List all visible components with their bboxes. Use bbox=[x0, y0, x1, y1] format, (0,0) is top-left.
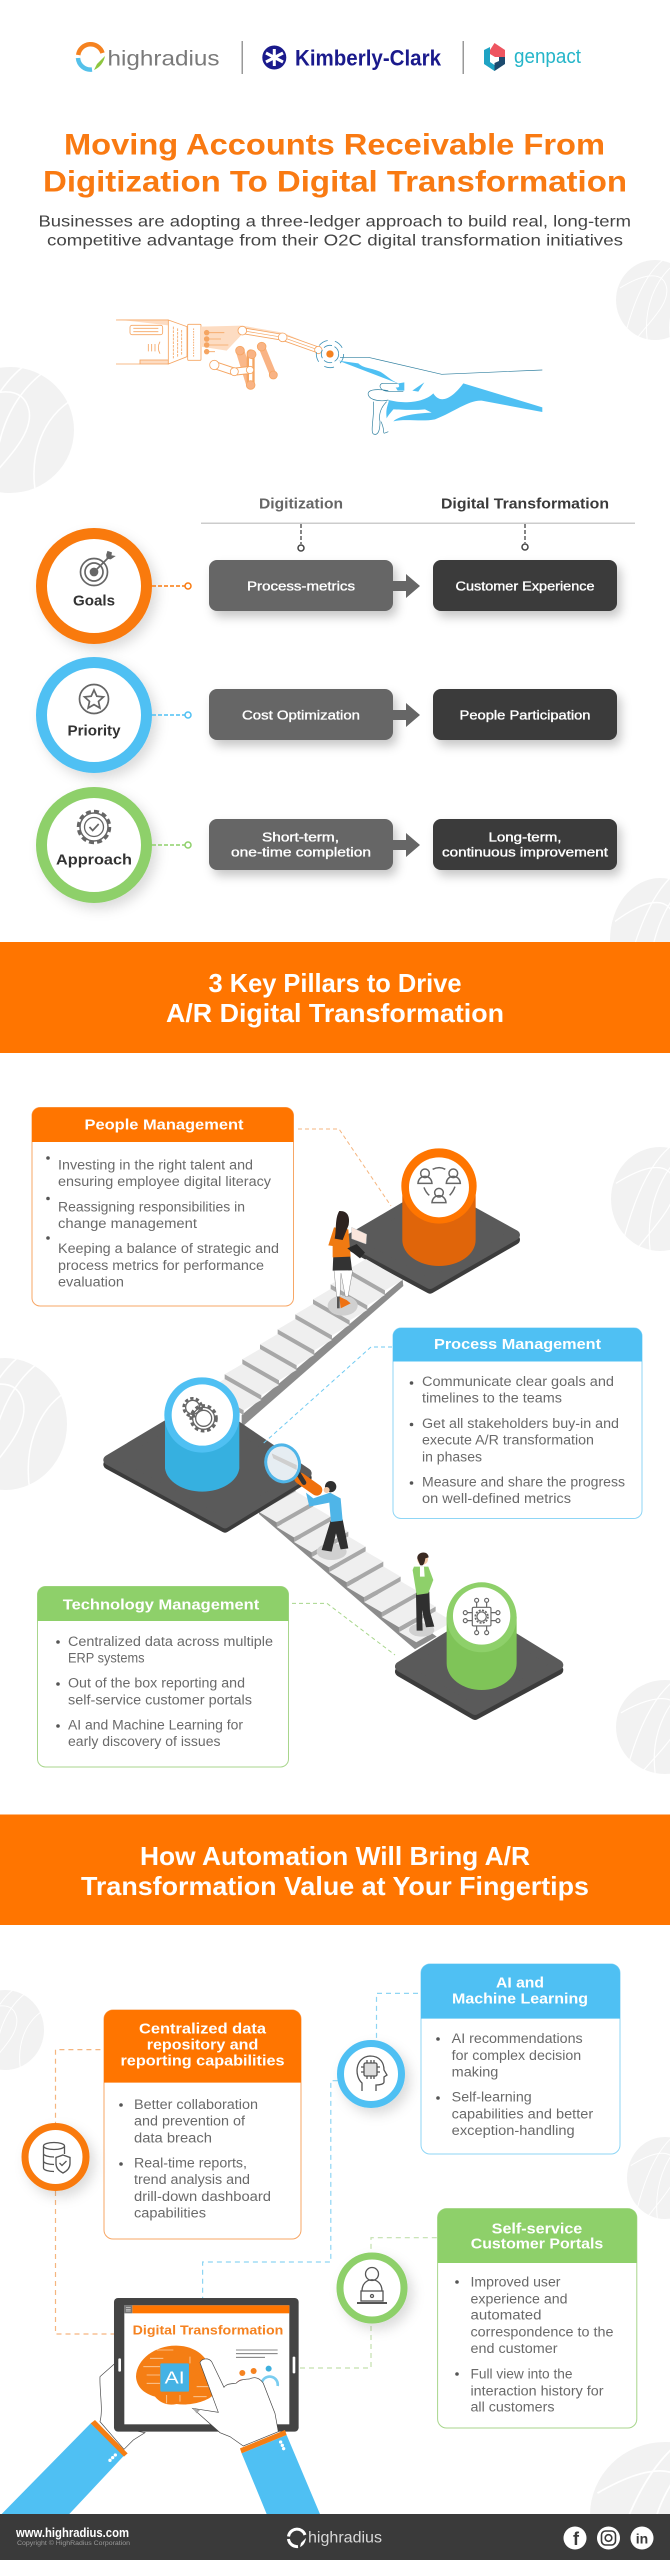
logo: Kimberly-Clark: Kimberly-Clark bbox=[295, 46, 442, 70]
bullet list: Full view into the bbox=[470, 2366, 572, 2382]
title: Digitization To Digital Transformation bbox=[43, 166, 627, 198]
panel: People Management bbox=[32, 1108, 294, 1306]
bullet list: Get all stakeholders buy-in and bbox=[422, 1416, 619, 1431]
circle: Goals: Goals bbox=[73, 592, 115, 610]
left hand outline bbox=[100, 2363, 145, 2449]
illustration: robot hand bbox=[116, 319, 344, 389]
platform: process pillar bbox=[108, 1403, 307, 1528]
figure: man in green bbox=[409, 1553, 434, 1637]
sleeve: left bbox=[2, 2420, 128, 2514]
digitization box bbox=[209, 560, 393, 611]
logo: genpact bbox=[484, 43, 581, 71]
bullet list: early discovery of issues bbox=[68, 1734, 221, 1749]
logo: genpact: genpact bbox=[514, 46, 581, 68]
illustration: human hand bbox=[338, 357, 542, 434]
panel: Centralized data bbox=[104, 2010, 301, 2239]
icon: linkedin: in bbox=[636, 2530, 648, 2546]
bullet list: AI and Machine Learning for bbox=[68, 1718, 244, 1732]
bullet list: capabilities bbox=[134, 2206, 206, 2220]
panel heading: repository and bbox=[147, 2036, 258, 2054]
panel: Technology Management bbox=[38, 1586, 288, 1767]
bullet list: data breach bbox=[134, 2130, 212, 2146]
panel heading bbox=[32, 1108, 294, 1142]
brain graphic: AI bbox=[165, 2368, 185, 2388]
connector: technology bbox=[292, 1603, 395, 1655]
icon: touch spark bbox=[316, 340, 344, 368]
brain graphic bbox=[136, 2346, 213, 2405]
title: Moving Accounts Receivable From bbox=[64, 128, 605, 162]
column header: Digitization: Digitization bbox=[259, 496, 343, 512]
bullet list: on well-defined metrics bbox=[422, 1491, 571, 1506]
panel heading: People Management bbox=[84, 1116, 244, 1134]
figure: man with magnifier bbox=[261, 1440, 348, 1560]
logo: highradius: highradius bbox=[108, 48, 220, 70]
digitization box bbox=[209, 689, 393, 740]
panel heading: Machine Learning bbox=[452, 1990, 588, 2008]
panel heading: reporting capabilities bbox=[120, 2052, 284, 2070]
platform: technology pillar bbox=[400, 1617, 558, 1715]
bullet list: trend analysis and bbox=[134, 2172, 250, 2187]
subtitle bbox=[38, 214, 631, 250]
bullet list: Investing in the right talent and bbox=[58, 1158, 253, 1172]
bullet list: correspondence to the bbox=[470, 2324, 614, 2340]
bullet list: change management bbox=[58, 1216, 197, 1231]
transformation box: Long-term, bbox=[488, 830, 562, 844]
panel: AI and Machine Learning bbox=[421, 1964, 620, 2154]
bullet list: in phases bbox=[422, 1450, 482, 1464]
transformation box: continuous improvement bbox=[442, 844, 608, 860]
bullet list: execute A/R transformation bbox=[422, 1432, 594, 1448]
transformation box bbox=[433, 560, 617, 611]
icon: gears bbox=[184, 1398, 216, 1431]
banner: 3 Key Pillars bbox=[0, 942, 670, 1053]
circle: Approach: Approach bbox=[56, 852, 132, 868]
icon: instagram bbox=[597, 2526, 620, 2550]
bullet list: timelines to the teams bbox=[422, 1390, 562, 1406]
banner: How Automation: Transformation Value at Your Fingertips bbox=[81, 1871, 589, 1901]
icon: people network bbox=[418, 1168, 460, 1203]
panel heading: Centralized data bbox=[139, 2020, 267, 2038]
bullet list: experience and bbox=[470, 2292, 568, 2306]
icon: star bbox=[80, 684, 108, 714]
transformation box bbox=[433, 819, 617, 870]
icon: database shield bbox=[25, 2126, 86, 2188]
panel heading bbox=[421, 1964, 620, 2019]
icon: facebook: f bbox=[573, 2529, 580, 2549]
icon: facebook bbox=[564, 2526, 586, 2550]
icon: linkedin bbox=[630, 2526, 654, 2550]
pillar: technology bbox=[447, 1582, 517, 1690]
bullet list: Improved user bbox=[470, 2274, 561, 2290]
bullet list: and prevention of bbox=[134, 2114, 245, 2128]
bullet list: Out of the box reporting and bbox=[68, 1676, 245, 1690]
banner: How Automation bbox=[0, 1814, 670, 1925]
digitization box: Process-metrics bbox=[247, 578, 356, 594]
circle: Goals bbox=[42, 534, 146, 638]
bullet list: for complex decision bbox=[452, 2048, 581, 2063]
platform: people pillar bbox=[348, 1190, 515, 1289]
bullet list: Measure and share the progress bbox=[422, 1474, 625, 1490]
logo: highradius bbox=[78, 44, 220, 70]
bullet list: self-service customer portals bbox=[68, 1692, 252, 1708]
figure: woman with laptop bbox=[328, 1211, 367, 1316]
bullet list: ERP systems bbox=[68, 1650, 145, 1666]
arrow bbox=[393, 703, 420, 727]
bullet list: Real-time reports, bbox=[134, 2156, 247, 2170]
panel heading bbox=[104, 2010, 301, 2083]
digitization box: one-time completion bbox=[231, 844, 371, 860]
icon: gear with check bbox=[78, 812, 110, 842]
bullet list: making bbox=[452, 2064, 498, 2080]
bullet list: process metrics for performance bbox=[58, 1258, 264, 1273]
bullet list bbox=[134, 2097, 271, 2220]
banner: How Automation: How Automation Will Bring A/R bbox=[140, 1841, 530, 1871]
bullet list: Communicate clear goals and bbox=[422, 1374, 614, 1389]
banner: 3 Key Pillars: A/R Digital Transformation bbox=[166, 998, 504, 1028]
bullet list: all customers bbox=[470, 2400, 555, 2414]
bullet list: automated bbox=[470, 2308, 542, 2322]
bullet list bbox=[452, 2031, 594, 2138]
bullet list: drill-down dashboard bbox=[134, 2189, 271, 2204]
right hand bbox=[193, 2359, 278, 2446]
circle: Approach bbox=[42, 792, 146, 898]
bullet list bbox=[422, 1374, 625, 1506]
chart lines and gauges bbox=[236, 2350, 278, 2386]
bullet list: Self-learning bbox=[452, 2090, 532, 2104]
icon: user at laptop bbox=[340, 2256, 404, 2320]
title bbox=[43, 128, 627, 198]
bullet list: Centralized data across multiple bbox=[68, 1634, 273, 1649]
bullet list: Better collaboration bbox=[134, 2097, 258, 2112]
digitization box: Short-term, bbox=[262, 830, 339, 844]
panel heading: Process Management bbox=[434, 1336, 601, 1353]
bullet list: Keeping a balance of strategic and bbox=[58, 1241, 279, 1256]
stairs: upper flight bbox=[207, 1259, 403, 1427]
illustration: staircase with three pillars bbox=[108, 1148, 558, 1715]
stairs: lower flight bbox=[241, 1476, 453, 1649]
bullet list bbox=[58, 1158, 279, 1290]
pillar: process bbox=[164, 1377, 240, 1492]
subtitle: Businesses are adopting a three-ledger approach to build real, long-term bbox=[38, 214, 631, 230]
bullet list bbox=[470, 2274, 614, 2414]
bullet list: exception-handling bbox=[452, 2123, 575, 2138]
panel heading bbox=[38, 1586, 288, 1621]
banner: 3 Key Pillars: 3 Key Pillars to Drive bbox=[208, 968, 462, 998]
panel heading bbox=[438, 2209, 637, 2263]
tablet bbox=[114, 2298, 299, 2432]
bullet list: interaction history for bbox=[470, 2384, 604, 2398]
footer bbox=[0, 2514, 670, 2560]
transformation box: People Participation bbox=[460, 708, 590, 722]
digitization box bbox=[209, 819, 393, 870]
bullet list: evaluation bbox=[58, 1274, 124, 1290]
subtitle: competitive advantage from their O2C digital transformation initiatives bbox=[47, 232, 623, 250]
digitization box: Cost Optimization bbox=[242, 708, 360, 722]
panel heading: AI and bbox=[496, 1974, 544, 1992]
arrow bbox=[393, 574, 420, 598]
bullet list bbox=[68, 1634, 273, 1749]
row: Priority bbox=[42, 662, 617, 768]
bullet list: ensuring employee digital literacy bbox=[58, 1174, 271, 1189]
connector: people bbox=[298, 1129, 391, 1206]
column header: Digital Transformation: Digital Transformation bbox=[441, 496, 609, 512]
illustration: tablet with hands bbox=[2, 2298, 320, 2514]
connectors: fingertips section bbox=[56, 1993, 437, 2368]
pillar: people bbox=[401, 1148, 477, 1266]
panel heading bbox=[393, 1328, 642, 1362]
row: Approach bbox=[42, 792, 617, 898]
panel: Process Management bbox=[393, 1328, 642, 1518]
sleeve: right bbox=[240, 2430, 320, 2514]
icon: target bbox=[80, 552, 114, 586]
screen heading: Digital Transformation bbox=[133, 2322, 283, 2337]
icon: AI head bbox=[340, 2044, 402, 2104]
panel: Self-service Customer Portals bbox=[438, 2209, 637, 2428]
circle: Priority bbox=[42, 662, 146, 768]
panel heading: Self-service bbox=[492, 2220, 582, 2238]
copyright: Copyright © HighRadius Corporation bbox=[17, 2539, 130, 2547]
header logos bbox=[78, 41, 581, 74]
row: Goals bbox=[42, 534, 617, 638]
panel heading: Customer Portals bbox=[471, 2236, 603, 2252]
footer logo: highradius bbox=[308, 2530, 382, 2546]
bullet list: end customer bbox=[470, 2341, 558, 2356]
connector: process bbox=[262, 1347, 392, 1445]
bullet list: AI recommendations bbox=[452, 2031, 583, 2046]
table headers bbox=[201, 496, 635, 551]
icon: chip with gear bbox=[463, 1598, 500, 1635]
transformation box bbox=[433, 689, 617, 740]
arrow bbox=[393, 833, 420, 857]
transformation box: Customer Experience bbox=[456, 578, 594, 594]
circle: Priority: Priority bbox=[68, 722, 121, 740]
bullet list: Reassigning responsibilities in bbox=[58, 1200, 245, 1214]
panel heading: Technology Management bbox=[63, 1596, 259, 1614]
website: www.highradius.com bbox=[15, 2526, 129, 2540]
bullet list: capabilities and better bbox=[452, 2106, 594, 2122]
